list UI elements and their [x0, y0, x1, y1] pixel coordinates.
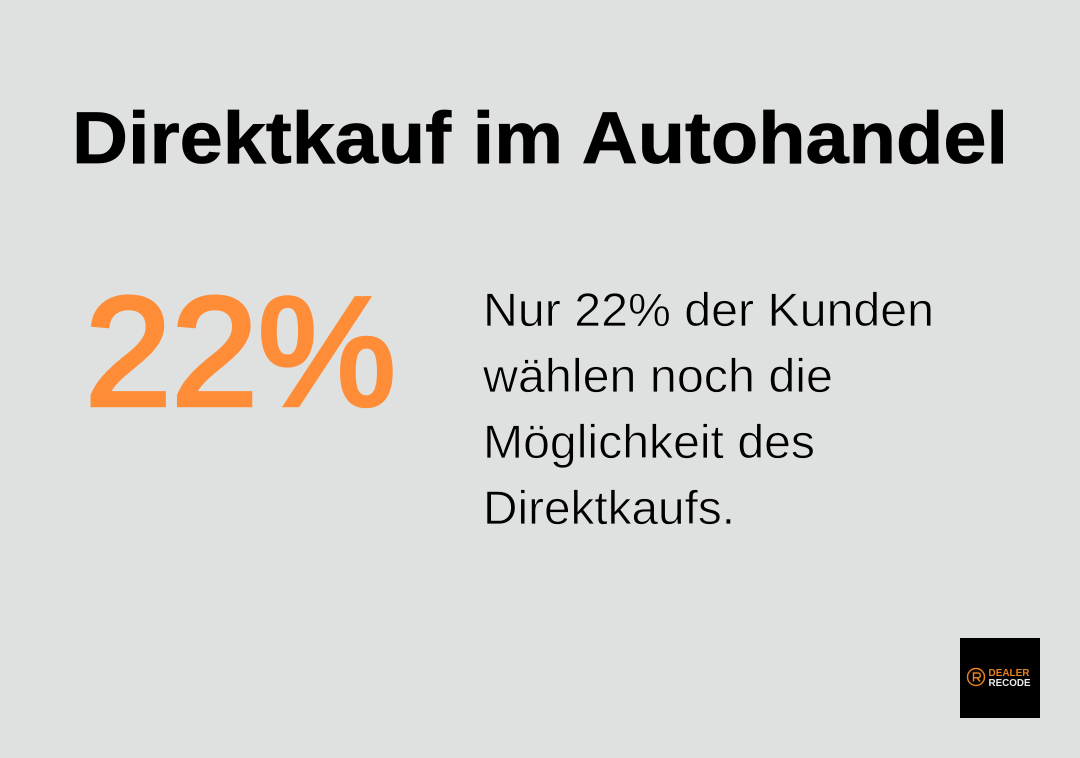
- description text: Direktkaufs.: [483, 481, 735, 534]
- description text: [482, 283, 934, 534]
- statistic: 22%: 22%: [85, 265, 396, 438]
- logo wordmark: RECODE: [988, 677, 1030, 689]
- title: Direktkauf im Autohandel: [72, 98, 1008, 179]
- description text: wählen noch die: [482, 349, 833, 402]
- logo: Dealer Recode: [960, 638, 1040, 718]
- logo icon: [968, 668, 984, 686]
- logo wordmark: [988, 667, 1030, 689]
- logo wordmark: DEALER: [988, 667, 1030, 679]
- description text: Möglichkeit des: [483, 415, 815, 468]
- description text: Nur 22% der Kunden: [483, 283, 934, 336]
